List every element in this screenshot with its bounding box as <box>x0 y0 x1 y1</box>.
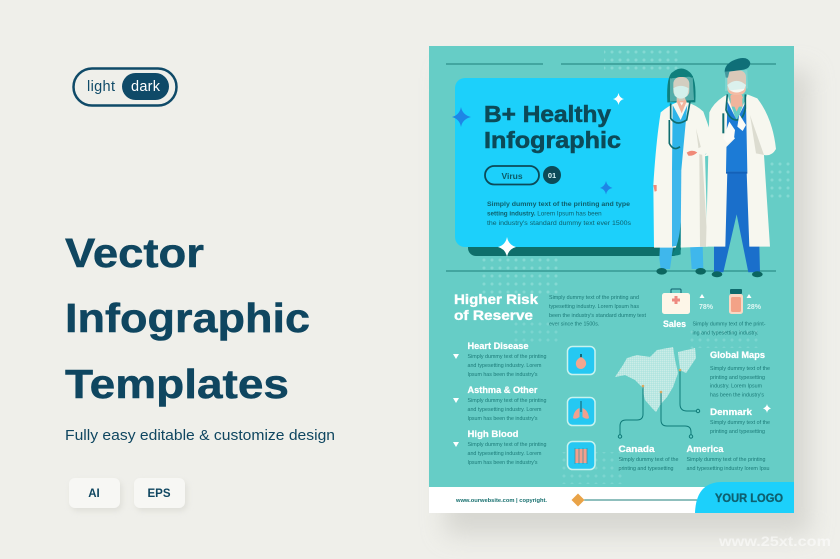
label: america: and typesetting industry lorem Ipsu <box>686 466 770 472</box>
item: high blood <box>453 429 547 466</box>
panel face <box>455 78 680 247</box>
hero title: B+ Healthy <box>484 101 611 127</box>
map pins <box>642 369 681 393</box>
main heading: Vector <box>65 230 204 276</box>
main heading <box>65 230 310 407</box>
subtitle: Fully easy editable & customize design <box>65 427 335 444</box>
hero panel <box>455 78 681 256</box>
panel shadow <box>468 200 681 256</box>
main heading: Infographic <box>65 295 310 341</box>
label: denmark: Denmark <box>710 407 753 418</box>
hero text <box>487 201 631 227</box>
hero text: the industry's standard dummy text ever 1500s <box>487 220 631 227</box>
virus pill: Virus <box>501 171 523 181</box>
icon: bottle <box>729 289 743 314</box>
label: america: Simply dummy text of the printing <box>686 457 766 463</box>
toggle: light dark: light <box>87 79 115 95</box>
illustration: doctors <box>653 58 776 277</box>
label: canada: printing and typesetting <box>618 466 674 472</box>
item: heart disease: Ipsum has been the industry's <box>468 372 538 378</box>
format badge: AI: AI <box>88 488 100 500</box>
header rules <box>446 64 776 271</box>
label: global maps: industry. Lorem Ipsum <box>710 384 763 390</box>
star: blue small <box>600 181 612 194</box>
item: asthma: Ipsum has been the industry's <box>468 416 538 422</box>
label: denmark: Simply dummy text of the <box>710 420 770 426</box>
number badge <box>543 166 561 184</box>
icon: lungs <box>568 398 595 426</box>
star: white map <box>763 404 771 413</box>
poster <box>429 46 794 513</box>
item: asthma <box>453 385 547 422</box>
hero text: Simply dummy text of the printing and type <box>487 201 631 208</box>
format badge: AI <box>69 478 122 511</box>
icon: heart <box>568 346 595 374</box>
sales block <box>663 319 766 336</box>
label: denmark <box>710 407 770 435</box>
doctor: man <box>703 58 776 277</box>
format badge: EPS: EPS <box>147 488 171 500</box>
stat: 28%: 28% <box>747 304 762 311</box>
format badge: EPS <box>134 478 187 511</box>
number badge: 01 <box>548 171 556 180</box>
footer text: www.ourwebsite.com | copyright. <box>455 498 548 504</box>
section heading: higher risk: of Reserve <box>454 307 533 323</box>
doctor: woman <box>653 68 732 275</box>
label: global maps: Global Maps <box>710 350 765 361</box>
item: high blood: High Blood <box>468 429 519 440</box>
item: asthma: and typesetting industry. Lorem <box>468 407 542 413</box>
label: canada <box>618 444 679 472</box>
label: global maps: Simply dummy text of the <box>710 366 770 372</box>
intro text: Simply dummy text of the printing and <box>549 295 639 301</box>
item: heart disease: Heart Disease <box>468 341 528 352</box>
star: blue left <box>452 107 471 127</box>
main heading: Templates <box>65 361 289 407</box>
sales block: ing and typesetting industry. <box>692 330 758 336</box>
section heading: higher risk <box>454 291 538 323</box>
footer diamond <box>572 494 584 506</box>
item: heart disease: and typesetting industry. Lorem <box>468 363 542 369</box>
poster shadow <box>445 70 810 535</box>
icon: blood vessel <box>568 442 595 470</box>
logo text: YOUR LOGO <box>715 493 783 505</box>
item: high blood: and typesetting industry. Lorem <box>468 451 542 457</box>
stat: 78%: 78% <box>699 304 714 311</box>
item: heart disease <box>453 341 547 378</box>
label: denmark: printing and typesetting <box>710 429 765 435</box>
sales block: Simply dummy text of the print- <box>692 322 766 328</box>
stat: 78% <box>699 294 714 311</box>
section heading: higher risk: Higher Risk <box>454 291 538 307</box>
dot patterns <box>480 50 792 484</box>
item: heart disease: Simply dummy text of the printing <box>468 354 547 360</box>
item: asthma: Simply dummy text of the printing <box>468 398 547 404</box>
toggle: light dark: dark <box>131 79 161 95</box>
label: global maps: has been the industry's <box>710 392 764 398</box>
icon: medical case <box>662 289 690 314</box>
label: global maps <box>710 350 770 398</box>
footer band <box>429 482 794 513</box>
label: canada: Canada <box>618 444 655 455</box>
map connectors <box>618 370 700 438</box>
star: white bottom <box>498 237 516 257</box>
footer line <box>578 499 697 501</box>
label: america <box>686 444 770 472</box>
map: north america <box>615 347 696 412</box>
intro text: typesetting industry. Lorem Ipsum has <box>549 304 639 310</box>
sales block: Sales <box>663 319 686 330</box>
item: high blood: Simply dummy text of the printing <box>468 442 547 448</box>
label: america: America <box>686 444 724 455</box>
label: canada: Simply dummy text of the <box>618 457 679 463</box>
hero title: Infographic <box>484 127 621 153</box>
star: white top <box>613 93 624 105</box>
watermark: www.25xt.com <box>718 533 831 549</box>
toggle: light dark <box>74 68 176 106</box>
item: high blood: Ipsum has been the industry's <box>468 460 538 466</box>
item: asthma: Asthma & Other <box>468 385 538 396</box>
label: global maps: printing and typesetting <box>710 375 765 381</box>
poster background <box>429 46 794 513</box>
intro text <box>549 295 647 328</box>
hero text: setting industry. Lorem Ipsum has been <box>487 210 602 218</box>
virus pill <box>485 166 539 184</box>
intro text: been the industry's standard dummy text <box>549 313 647 319</box>
stat: 28% <box>746 294 762 311</box>
hero title <box>484 101 621 153</box>
intro text: ever since the 1500s. <box>549 322 599 328</box>
logo tab <box>695 482 794 513</box>
